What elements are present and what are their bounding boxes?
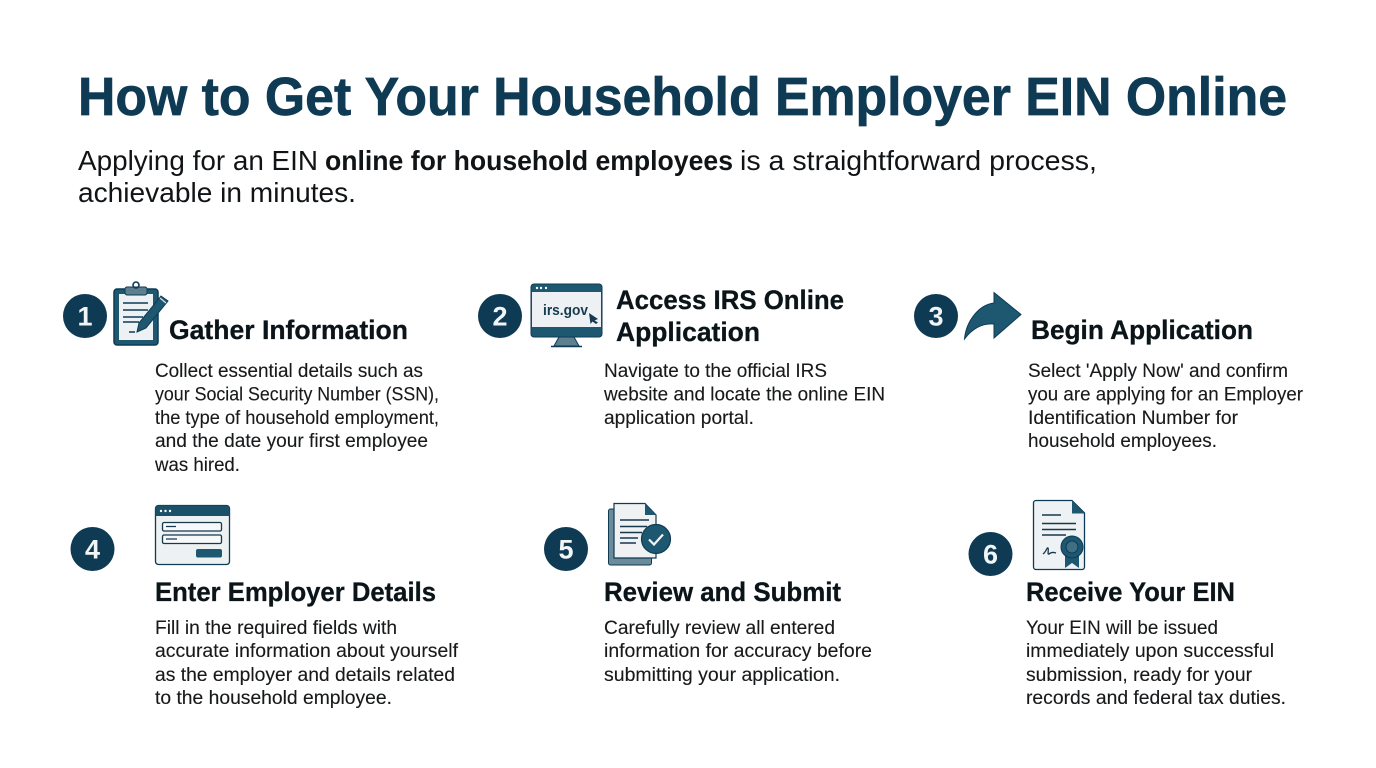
description: Your EIN will be issued [1026,618,1218,639]
description [155,618,459,709]
number badge 5: 5 [558,534,574,564]
description: submission, ready for your [1026,665,1253,686]
number badge 4 [70,527,114,571]
heading: Enter Employer Details [155,577,436,607]
description: Navigate to the official IRS [604,361,827,382]
description: Carefully review all entered [604,618,835,639]
title: How to Get Your Household Employer EIN Online [78,68,1287,127]
number badge 3: 3 [928,302,944,332]
description: website and locate the online EIN [603,384,885,406]
panel: step 1 gather information [63,282,439,476]
description: application portal. [604,408,754,429]
heading [616,285,844,347]
icon: monitor showing irs.gov [531,284,602,346]
heading: Gather Information [169,315,408,345]
description: Identification Number for [1028,408,1239,429]
panel: step 3 begin application [914,292,1304,452]
heading: Receive Your EIN [1026,577,1235,607]
description: records and federal tax duties. [1026,688,1286,709]
icon: web form window [156,506,230,564]
description: your Social Security Number (SSN), [155,384,439,406]
icon: clipboard and pen [114,282,168,345]
description: Collect essential details such as [155,361,423,382]
number badge 2 [478,294,522,338]
panel: step 5 review and submit [544,504,872,686]
description: Select 'Apply Now' and confirm [1028,361,1288,382]
description: the type of household employment, [155,408,439,429]
description: you are applying for an Employer [1028,384,1304,406]
subtitle [78,145,1097,208]
description [154,361,439,476]
subtitle: is a straightforward process, [740,145,1097,176]
subtitle: Applying for an EIN [78,145,318,176]
number badge 3 [914,294,958,338]
heading: Begin Application [1031,315,1253,345]
description: immediately upon successful [1026,641,1274,662]
number badge 6 [968,532,1012,576]
description: to the household employee. [155,688,392,709]
heading: Review and Submit [604,577,841,607]
number badge 6: 6 [983,540,998,570]
icon: monitor showing irs.gov: irs.gov [543,302,589,319]
panel: step 6 receive your EIN [968,500,1286,709]
description: was hired. [154,455,240,476]
panel: step 4 enter employer details [70,506,459,709]
panel: step 2 access IRS online application [478,284,885,429]
subtitle: achievable in minutes. [78,177,356,208]
icon: documents with check mark [608,504,670,565]
description [1028,361,1304,452]
description: household employees. [1028,431,1217,452]
number badge 1: 1 [77,302,93,332]
number badge 4: 4 [85,534,100,564]
number badge 5 [544,527,588,571]
description: and the date your first employee [155,431,428,452]
subtitle: online for household employees [325,145,733,176]
description [603,361,885,429]
heading: Application [616,317,760,347]
description [604,618,872,686]
number badge 2: 2 [492,302,508,332]
number badge 1 [63,294,107,338]
description: submitting your application. [604,665,840,686]
description [1026,618,1286,709]
icon: certificate with seal [1034,500,1084,570]
heading: Access IRS Online [616,285,844,315]
description: as the employer and details related [155,665,455,686]
description: information for accuracy before [604,641,872,662]
description: accurate information about yourself [155,641,459,662]
icon: curved arrow [964,292,1021,339]
description: Fill in the required fields with [155,618,397,639]
